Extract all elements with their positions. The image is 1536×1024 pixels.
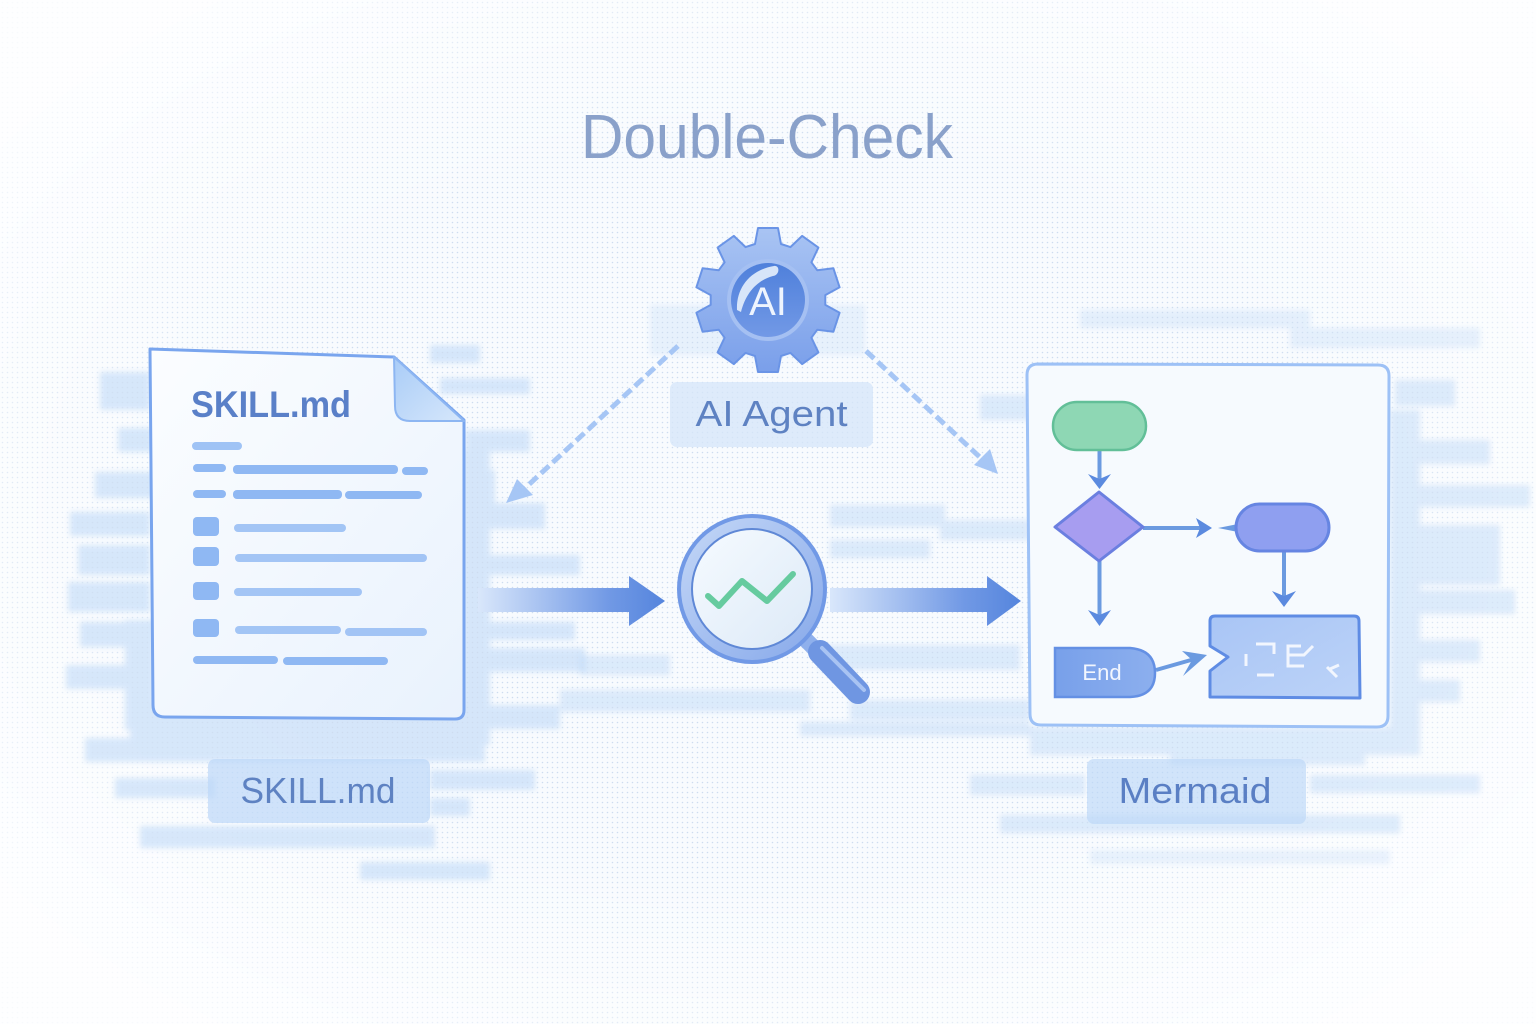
arrow: SKILL.md to check (478, 576, 665, 626)
check trend line (708, 574, 793, 606)
background smudges: left cluster (66, 345, 585, 880)
End node (1055, 648, 1155, 697)
start node (1053, 402, 1146, 450)
panel: Mermaid flowchart (1027, 364, 1389, 727)
arrow: check to Mermaid (830, 576, 1021, 626)
dashed arrow: AI Agent to SKILL.md (506, 346, 678, 503)
flow connectors (1100, 450, 1284, 670)
icon: AI gear: AI (749, 280, 787, 324)
decision node (1055, 492, 1143, 561)
label: SKILL.md (208, 759, 430, 823)
document text lines (192, 442, 428, 665)
label: AI Agent: AI Agent (696, 393, 848, 434)
panel: SKILL.md document (150, 349, 464, 719)
label: Mermaid (1087, 759, 1306, 824)
label: SKILL.md: SKILL.md (240, 770, 396, 811)
subprocess node (1210, 616, 1360, 698)
process node (1236, 504, 1329, 551)
icon: folded corner (394, 357, 464, 421)
label: Mermaid: Mermaid (1118, 770, 1272, 811)
title: Double-Check (581, 103, 954, 172)
icon: magnifying glass (679, 516, 864, 692)
icon: AI gear (696, 228, 840, 372)
label: AI Agent (670, 382, 873, 447)
background smudges: centre and right cluster (560, 305, 1530, 864)
dashed arrow: AI Agent to Mermaid (866, 351, 998, 474)
document heading: SKILL.md (191, 384, 351, 425)
End node: End (1082, 660, 1122, 685)
